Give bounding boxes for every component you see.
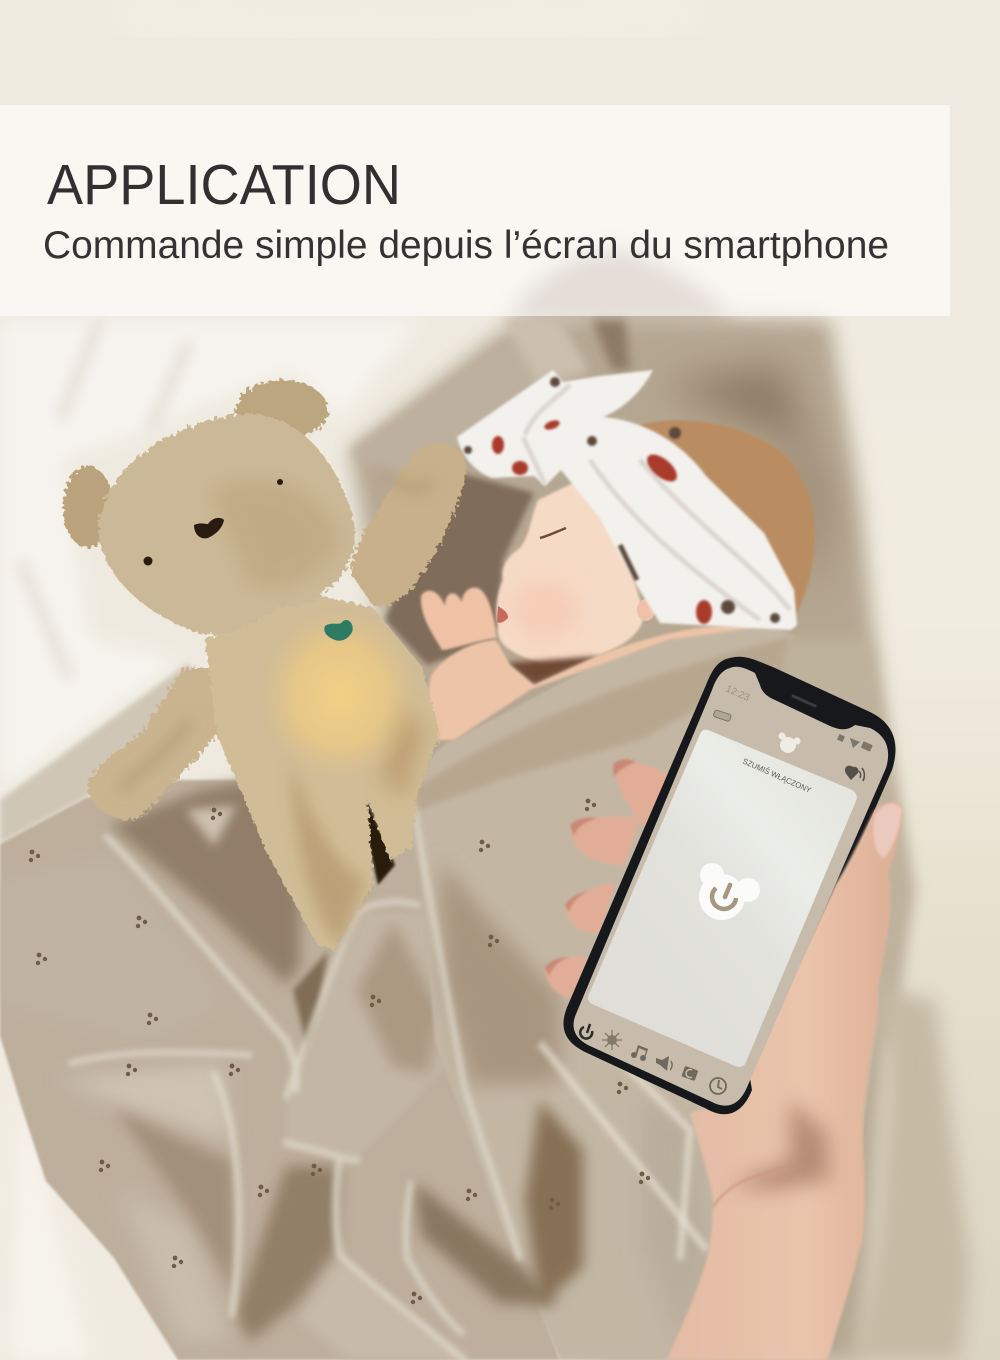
light patches: [0, 860, 220, 1040]
status bar time: 12:23: [724, 684, 751, 704]
teddy legs and body: [205, 593, 440, 950]
notch speaker: [793, 696, 815, 706]
highlight creases: [71, 837, 464, 1360]
phone screen: [574, 667, 888, 1106]
headband cherries: [492, 419, 712, 624]
night icon: [681, 1066, 698, 1081]
phone body: [563, 657, 896, 1114]
front blanket wrapping baby: [406, 621, 880, 1360]
baby shoulder and arm: [428, 625, 770, 740]
thumb nail: [873, 804, 902, 858]
blanket knit hole pattern: [29, 799, 650, 1304]
title: APPLICATION: [47, 153, 401, 217]
sun icon: [602, 1030, 622, 1050]
subtitle: Commande simple depuis l’écran du smartphone: [43, 224, 889, 267]
wrist crease: [713, 1165, 790, 1207]
baby hand: [421, 587, 497, 650]
crotch shadow: [367, 800, 395, 885]
screen background: [574, 667, 888, 1106]
teddy bear: [63, 380, 467, 950]
teddy shading: [210, 481, 340, 587]
teddy ears: [63, 466, 113, 548]
back blanket behind baby: [350, 252, 970, 1360]
teddy belly glow: [260, 607, 420, 783]
bear logo top: [778, 732, 800, 753]
baby hat: [640, 420, 815, 625]
battery icon: [713, 710, 731, 722]
bear power button: [699, 863, 760, 920]
content panel: [588, 730, 857, 1067]
teddy right arm: [350, 443, 467, 606]
baby ear: [637, 599, 655, 621]
sound waves: [859, 768, 864, 781]
phone bottom bezel: [692, 1078, 752, 1114]
teddy heart: [324, 620, 353, 641]
baby face: [496, 470, 644, 666]
clock icon: [710, 1078, 726, 1094]
status label: SZUMIŚ WŁĄCZONY: [741, 757, 813, 795]
teddy head: [98, 414, 355, 634]
volume icon: [656, 1056, 672, 1071]
translucent header panel: [0, 105, 950, 316]
headband: [457, 370, 797, 630]
neck shadow: [507, 656, 599, 685]
headband folds: [523, 385, 790, 620]
baby: [421, 370, 815, 740]
teddy face: [144, 479, 283, 566]
teddy left arm: [87, 668, 218, 820]
baby cheek: [511, 582, 579, 638]
blanket over left side of bed: [0, 780, 560, 1360]
bottom navigation icons: [580, 1024, 726, 1094]
music icon: [631, 1045, 648, 1061]
hand holding phone: [667, 802, 903, 1360]
device status heart: [845, 766, 859, 780]
status icons: [837, 734, 873, 752]
baby eye and mouth: [540, 528, 566, 538]
palm shadow: [730, 1100, 830, 1190]
brown folds: [110, 780, 300, 985]
power icon: [580, 1024, 592, 1039]
hand fingers behind phone: [545, 759, 668, 998]
